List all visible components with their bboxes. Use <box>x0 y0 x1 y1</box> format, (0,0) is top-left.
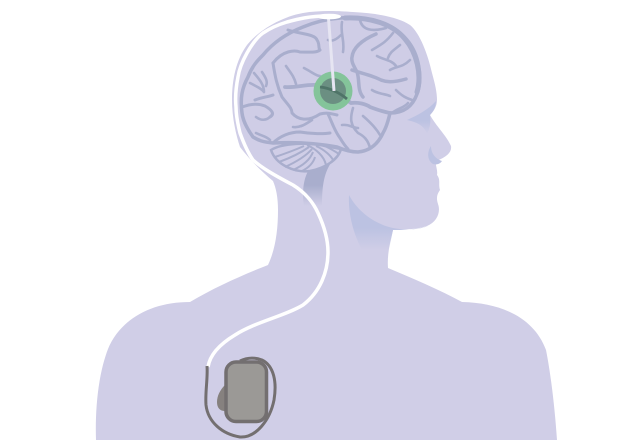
brainstem <box>303 160 333 206</box>
implanted pulse generator <box>206 358 275 437</box>
right brain band <box>345 18 419 92</box>
extension wire <box>208 16 328 367</box>
electrode lead <box>328 18 334 91</box>
sulci <box>242 20 412 149</box>
brain <box>241 18 420 152</box>
connector tab <box>217 385 225 411</box>
target zone: green stimulation halo <box>314 72 352 110</box>
burr hole cap <box>317 14 341 19</box>
generator case <box>226 362 266 422</box>
body silhouette <box>96 11 557 440</box>
cerebellum <box>271 144 341 171</box>
nostril shadow <box>428 146 442 164</box>
jaw shadow <box>349 195 428 250</box>
coiled lead <box>206 358 275 437</box>
brow shadow <box>407 101 436 134</box>
